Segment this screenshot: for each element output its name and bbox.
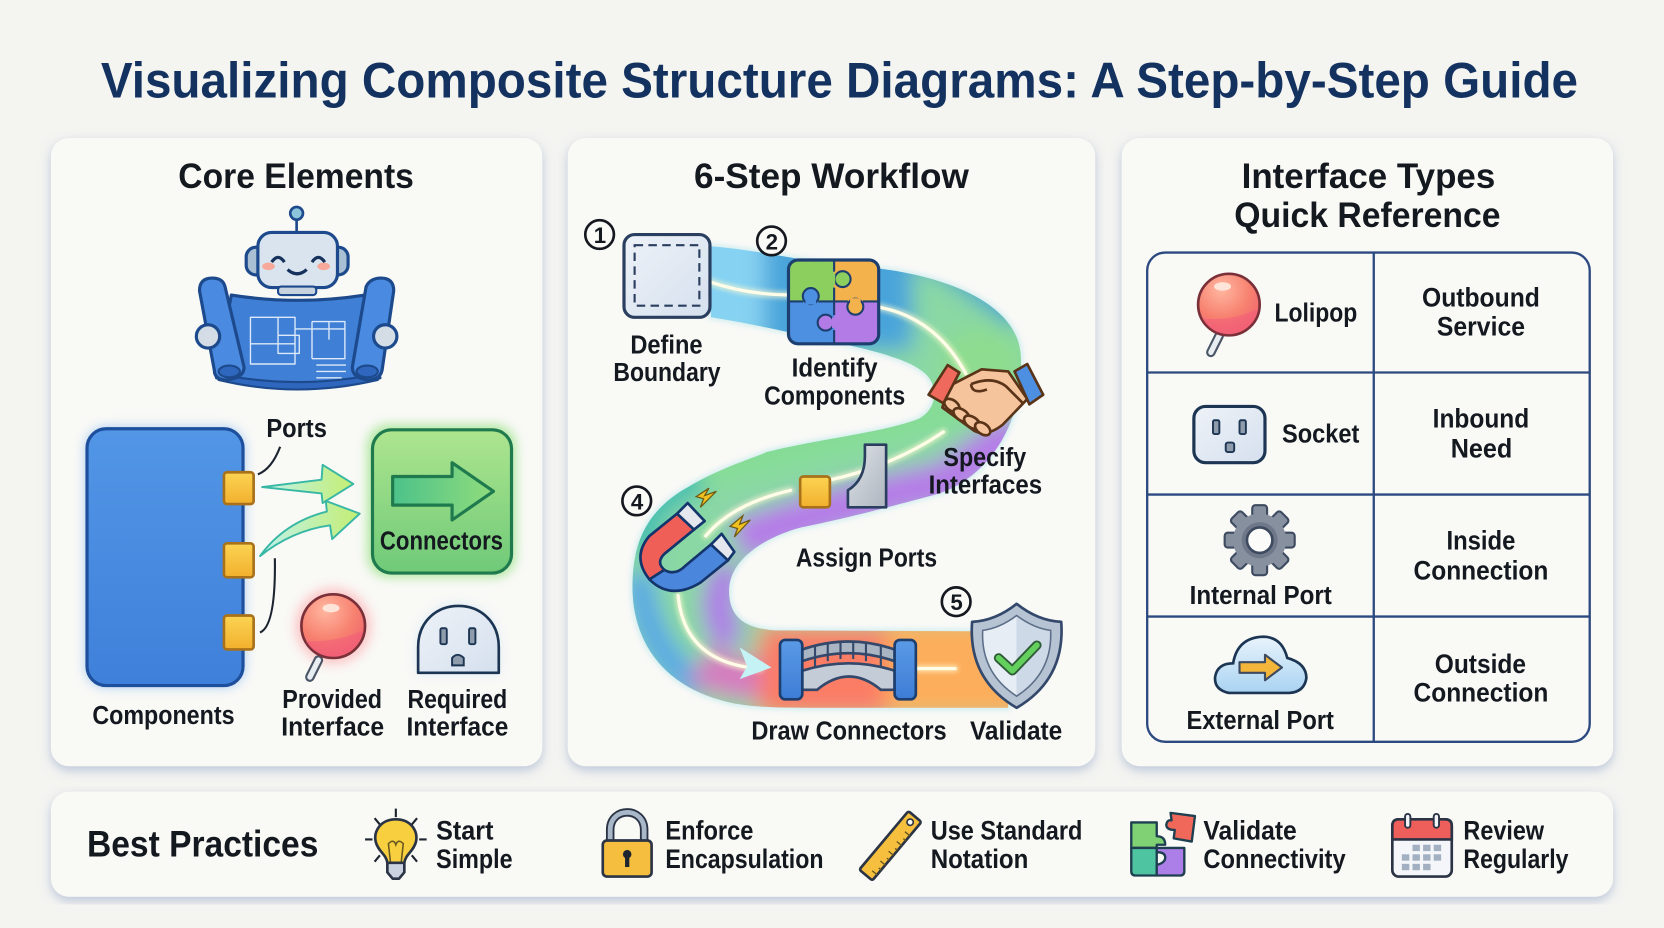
component block [85,427,245,688]
practice: use standard notation: Notation [931,844,1028,874]
practice: validate connectivity: Validate [1203,815,1297,845]
row: external port: External Port [1186,707,1334,735]
practice: review regularly: Regularly [1463,844,1569,874]
step 2: identify components [757,227,905,410]
step 1: define boundary [585,220,721,387]
step: draw connectors bridge [751,640,947,746]
step 3: specify interfaces: Specify [943,444,1027,472]
step: draw connectors bridge: Draw Connectors [751,718,947,746]
practice: start simple: Simple [436,844,513,874]
step 1: define boundary: Define [630,331,703,359]
connector block [367,424,516,577]
row: socket: Socket [1282,421,1360,449]
step 3: specify interfaces [929,364,1043,499]
practice: validate connectivity: Connectivity [1203,844,1346,874]
title: Visualizing Composite Structure Diagrams: A Step-by-Step Guide [101,53,1578,109]
step 3: specify interfaces: Interfaces [929,471,1042,499]
step 4: magnet [622,487,750,591]
step 2: identify components: 2 [766,229,778,254]
label: ports with leader lines: Ports [266,415,327,443]
label: required interface: Required [408,686,507,714]
step: assign ports [796,445,937,573]
label: provided interface: Interface [281,713,384,741]
connector block: Connectors [380,528,503,556]
label: provided interface [281,686,384,741]
row: external port: Outside [1435,649,1526,679]
heading: interface types: Quick Reference [1234,196,1501,235]
heading: interface types [1234,157,1501,235]
row: external port [1186,637,1548,735]
panel: interface types quick reference [1122,138,1613,766]
step 5: validate shield: Validate [970,718,1062,746]
practice: review regularly [1392,814,1569,877]
ports [224,472,254,649]
heading: best practices: Best Practices [87,822,318,864]
practice: start simple [365,809,513,879]
row: socket: Inbound [1433,404,1529,434]
row: lollipop: Service [1437,311,1525,341]
step 1: define boundary: 1 [594,223,606,248]
step 5: validate shield: 5 [950,590,963,615]
row: lollipop: Outbound [1422,283,1540,313]
icon: robot holding blueprint [196,207,397,389]
practice: validate connectivity [1131,813,1346,876]
glowing ribbon centre line and arrow [678,281,966,679]
practice: review regularly: Review [1463,815,1544,845]
step 2: identify components: Identify [792,355,878,383]
heading: core elements: Core Elements [178,157,414,196]
label: required interface [406,686,508,741]
row: socket: Need [1451,433,1512,463]
practice: enforce encapsulation: Encapsulation [665,844,824,874]
label: ports with leader lines [258,415,327,632]
row: internal port [1190,505,1548,610]
icon: required interface socket [417,604,499,673]
row: internal port: Internal Port [1190,582,1332,610]
label: provided interface: Provided [282,686,382,714]
practice: enforce encapsulation: Enforce [665,815,753,845]
row: internal port: Inside [1446,526,1515,556]
panel: best practices [51,792,1613,897]
step 2: identify components: Components [764,382,905,410]
label: required interface: Interface [406,713,508,741]
step 4: magnet: 4 [631,489,644,514]
row: socket [1194,404,1529,463]
step: assign ports: Assign Ports [796,545,937,573]
row: external port: Connection [1414,677,1548,707]
arrows: ports to connectors [260,465,360,556]
practice: start simple: Start [436,815,494,845]
heading: interface types: Interface Types [1242,157,1495,196]
row: internal port: Connection [1414,555,1548,585]
practice: enforce encapsulation [603,812,824,877]
icon: provided interface lollipop [295,588,371,677]
workflow ribbon [628,242,1025,712]
label: components: Components [92,702,235,730]
practice: use standard notation: Use Standard [931,815,1082,845]
panel: core elements [51,138,542,766]
heading: workflow: 6-Step Workflow [694,157,970,196]
row: lollipop [1198,274,1540,352]
panel: 6-step workflow [568,138,1095,766]
row: lollipop: Lolipop [1275,300,1357,328]
step 5: validate shield [942,587,1062,746]
reference table grid [1147,253,1590,742]
practice: use standard notation [859,811,1082,881]
step 1: define boundary: Boundary [613,359,721,387]
